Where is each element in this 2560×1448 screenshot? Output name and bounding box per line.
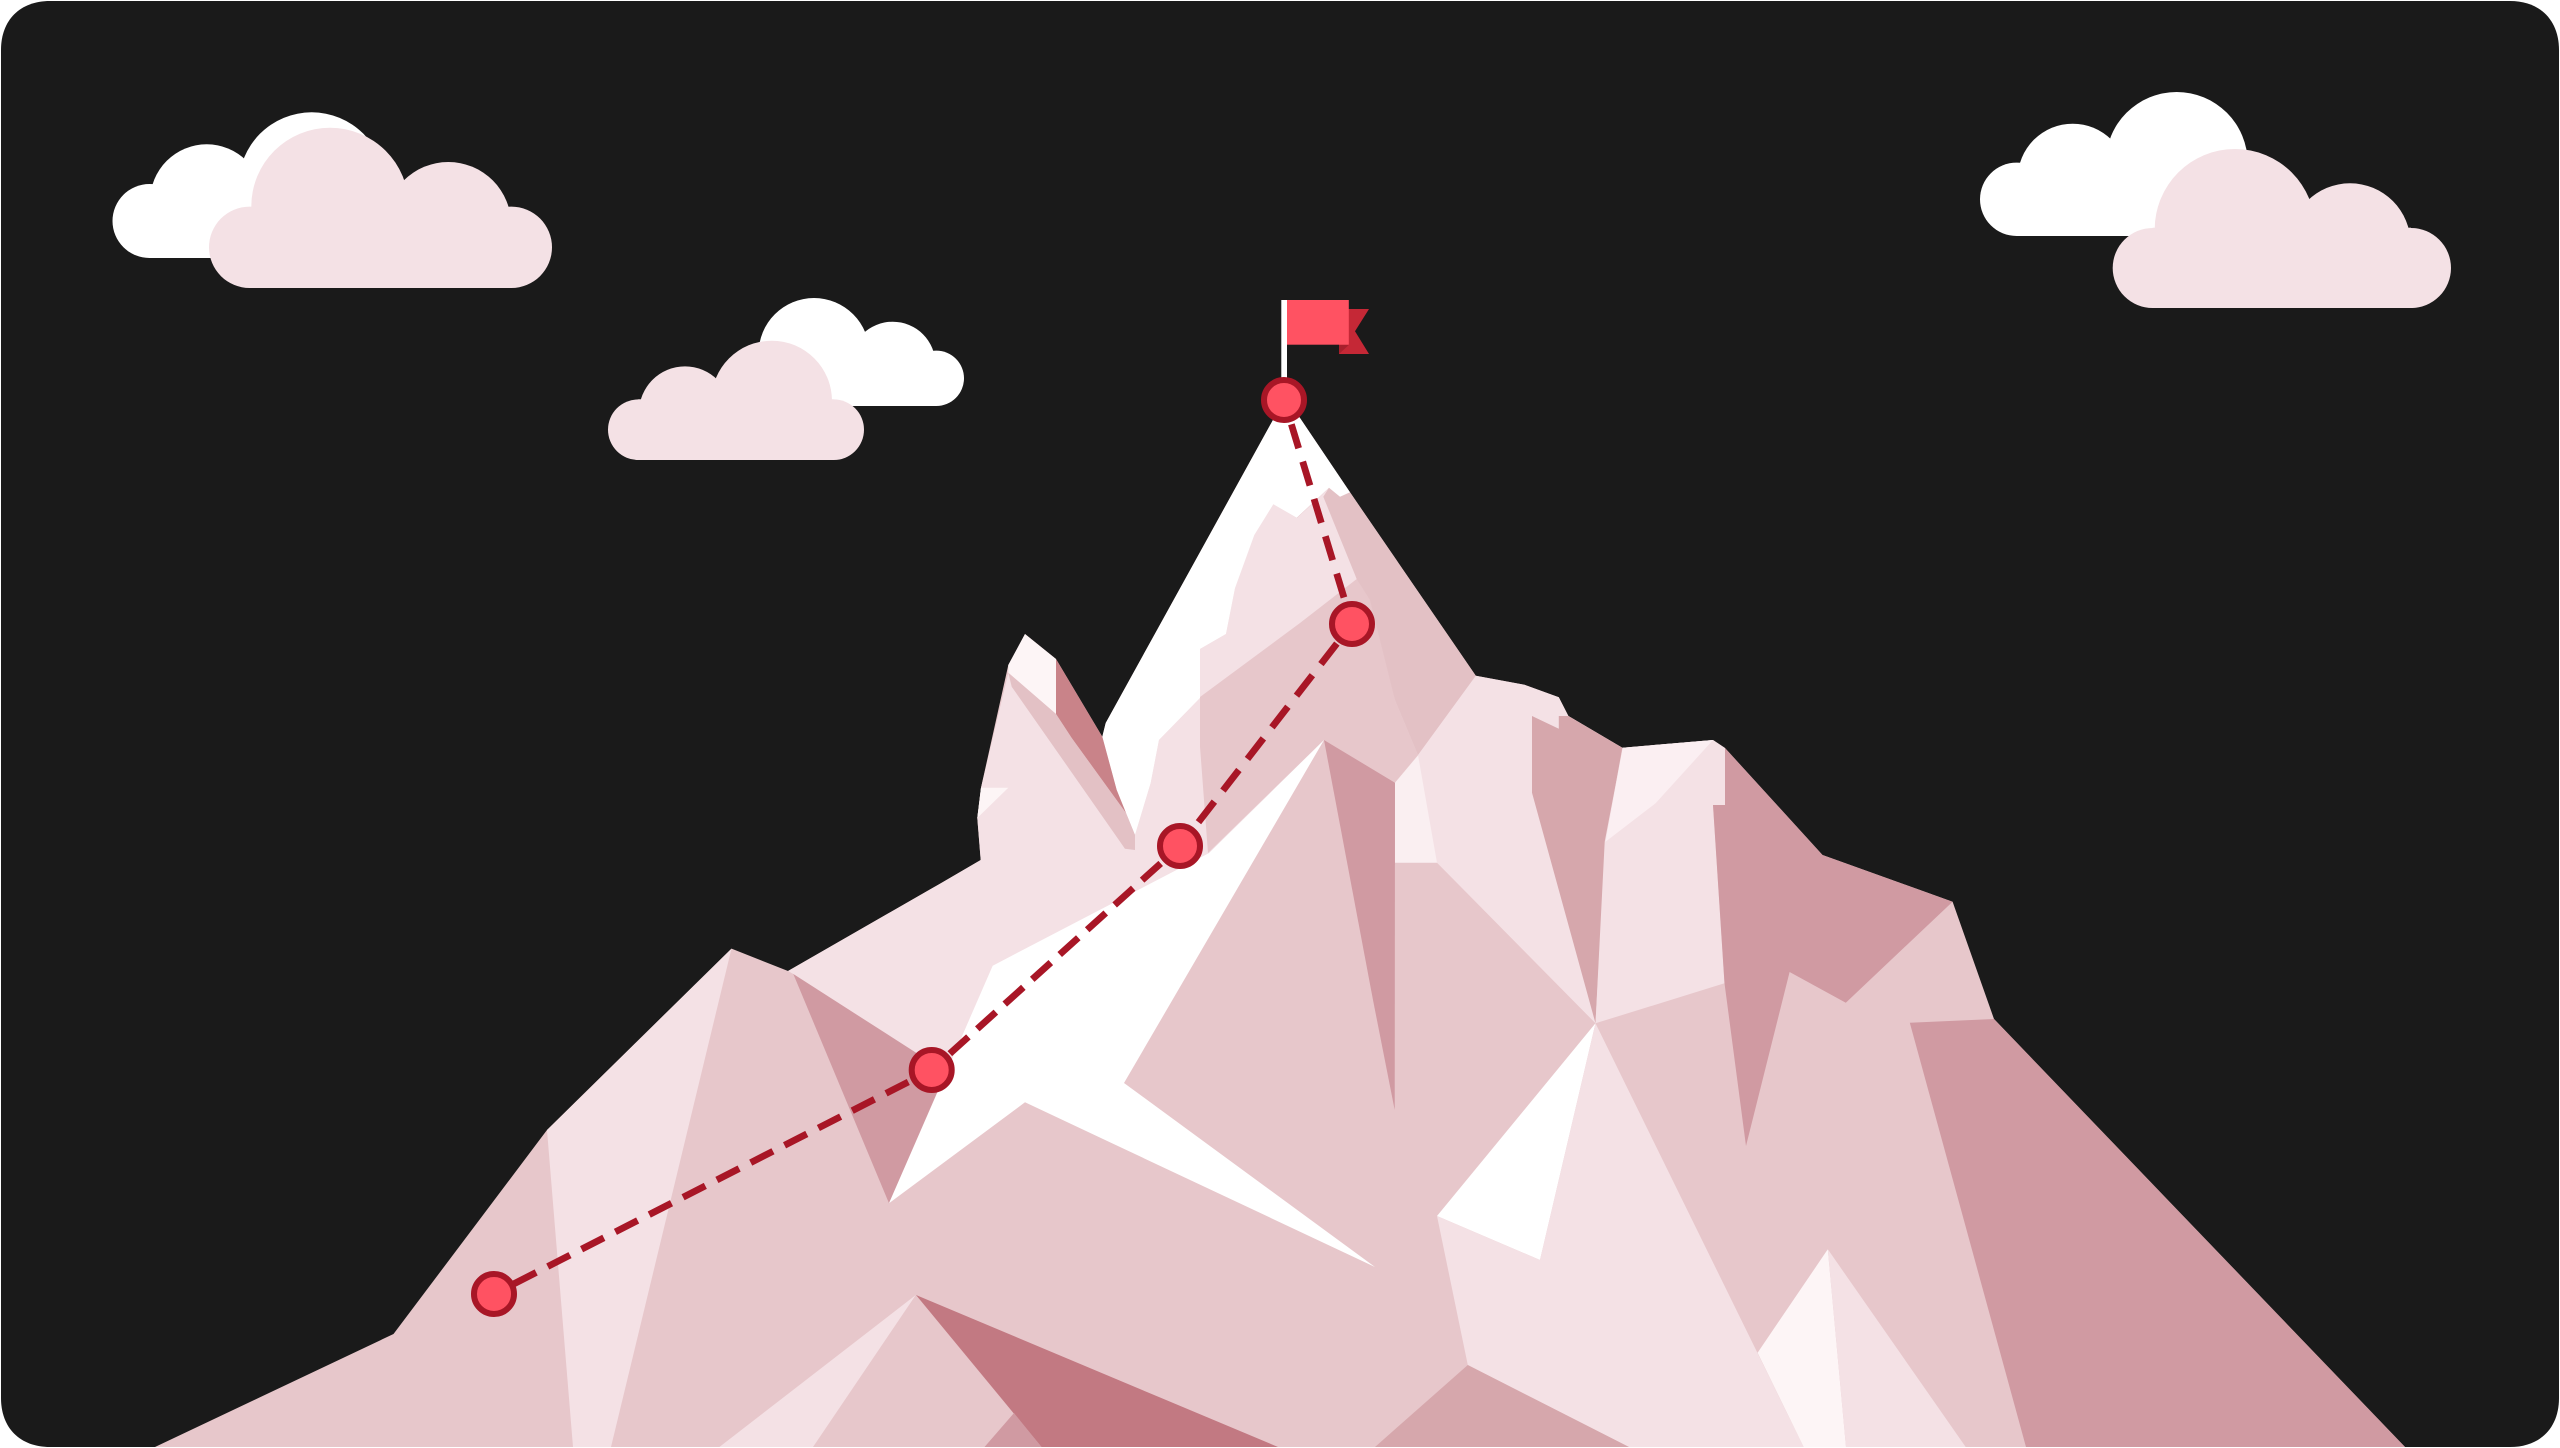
left spire mid facet: [1008, 673, 1135, 850]
mountain silhouette: [155, 400, 2405, 1447]
off-white facet by central strip: [1395, 755, 1439, 863]
bottom rose facet: [916, 1295, 1278, 1447]
bottom light facet right: [1828, 1249, 1966, 1447]
bottom small dark facet: [984, 1413, 1042, 1447]
pink cloud: centre: [608, 341, 864, 461]
waypoint: mid ridge: [1160, 826, 1200, 866]
upper body light facet: [788, 488, 1418, 1072]
right ridge light facet: [1596, 740, 1725, 1023]
left spire cap: [1008, 634, 1056, 714]
dashed climbing route: [494, 400, 1352, 1294]
shoulder darker facet: [1532, 716, 1622, 1023]
waypoint: lower slope: [912, 1050, 952, 1090]
cloud pair: top left: [112, 112, 552, 288]
pink cloud: top left: [209, 128, 552, 288]
right ridge off-white facet: [1606, 740, 1713, 842]
waypoint: upper ridge: [1332, 604, 1372, 644]
route waypoints: [474, 380, 1372, 1314]
flag pole: [1281, 300, 1287, 380]
pink cloud: top right: [2113, 149, 2451, 310]
flag fold: [1339, 345, 1349, 354]
large white shard: [889, 740, 1375, 1267]
left slope light facet: [547, 949, 732, 1447]
flag front: [1287, 300, 1349, 345]
white cloud: top right: [1980, 92, 2248, 236]
right shoulder light facet: [1418, 676, 1622, 1023]
mountain: [155, 400, 2405, 1447]
flag on the summit: [1281, 300, 1369, 380]
hub white triangle: [1437, 1023, 1596, 1260]
left spire shadow: [1056, 659, 1126, 813]
cloud pair: top right: [1980, 92, 2451, 310]
cloud pair: centre: [608, 298, 964, 461]
central dark strip: [1324, 740, 1395, 1110]
waypoint: summit: [1264, 380, 1304, 420]
bottom left light triangle: [719, 1295, 916, 1447]
peak right face: [1323, 488, 1476, 755]
white cloud: top left: [112, 112, 385, 258]
lower right dark slope: [1910, 1019, 2405, 1447]
waypoint: start: [474, 1274, 514, 1314]
bottom darker facet: [1375, 1365, 1629, 1447]
snow cap: [1102, 400, 1350, 835]
dark facet beside white shard: [793, 974, 946, 1203]
left spire small highlight: [977, 788, 1008, 818]
right ridge dark facet: [1713, 748, 1953, 1146]
flag tail: [1339, 309, 1369, 354]
white cloud: centre: [759, 298, 964, 409]
peak medium facet: [1200, 579, 1418, 853]
bottom off-white facet: [1758, 1249, 1846, 1447]
hub light facet: [1437, 1023, 1804, 1447]
